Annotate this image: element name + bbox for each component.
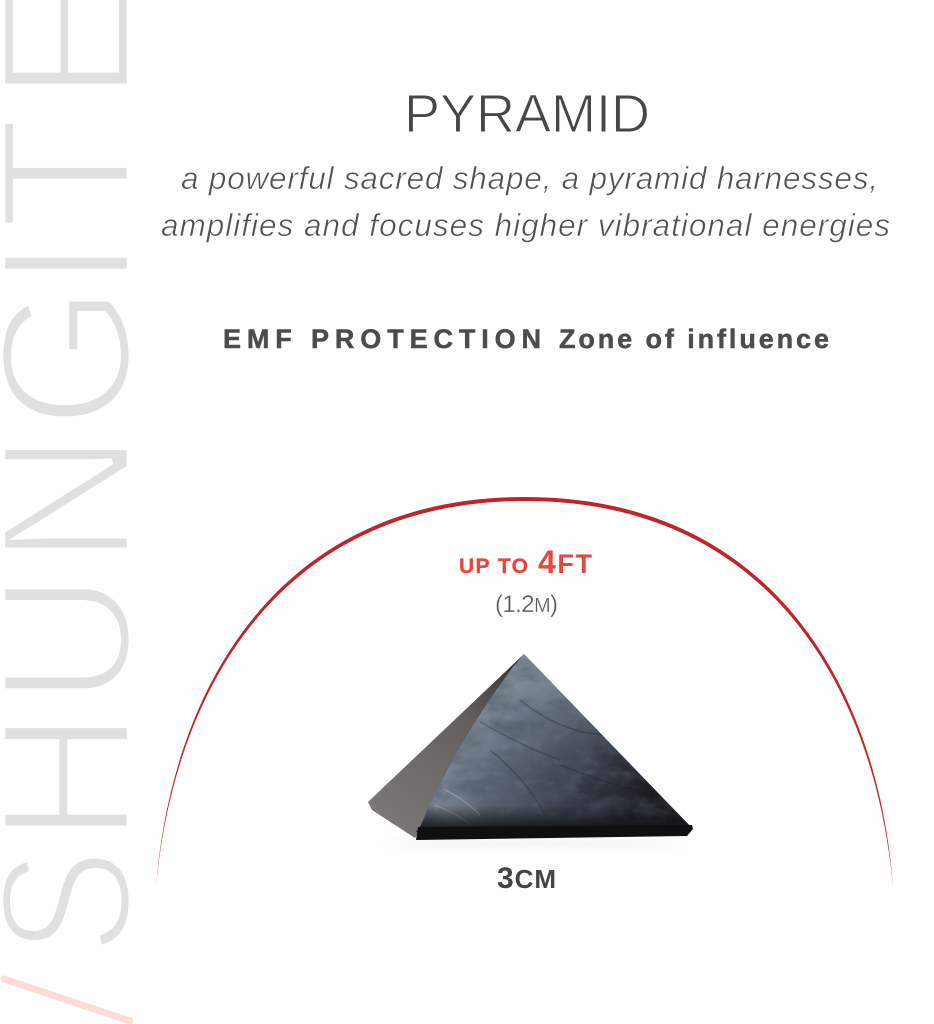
section heading: EMF PROTECTION — [223, 324, 541, 354]
range label: up to 4ft: 4FT — [538, 544, 592, 580]
subtitle — [161, 160, 890, 243]
title: PYRAMID — [404, 84, 650, 144]
section heading — [223, 324, 829, 354]
pyramid photo — [360, 650, 700, 847]
section heading: Zone of influence — [559, 324, 829, 354]
subtitle: amplifies and focuses higher vibrational energies — [161, 207, 890, 243]
left face — [368, 654, 524, 838]
subtitle: a powerful sacred shape, a pyramid harnesses, — [181, 160, 878, 196]
range label: up to 4ft — [459, 544, 592, 580]
base edge — [416, 825, 693, 840]
range label: metric: (1.2M) — [495, 591, 558, 618]
size label: 3CM — [497, 862, 556, 895]
right face — [416, 654, 689, 832]
range label: up to 4ft: UP TO — [459, 555, 528, 578]
arc: zone of influence — [156, 497, 893, 888]
